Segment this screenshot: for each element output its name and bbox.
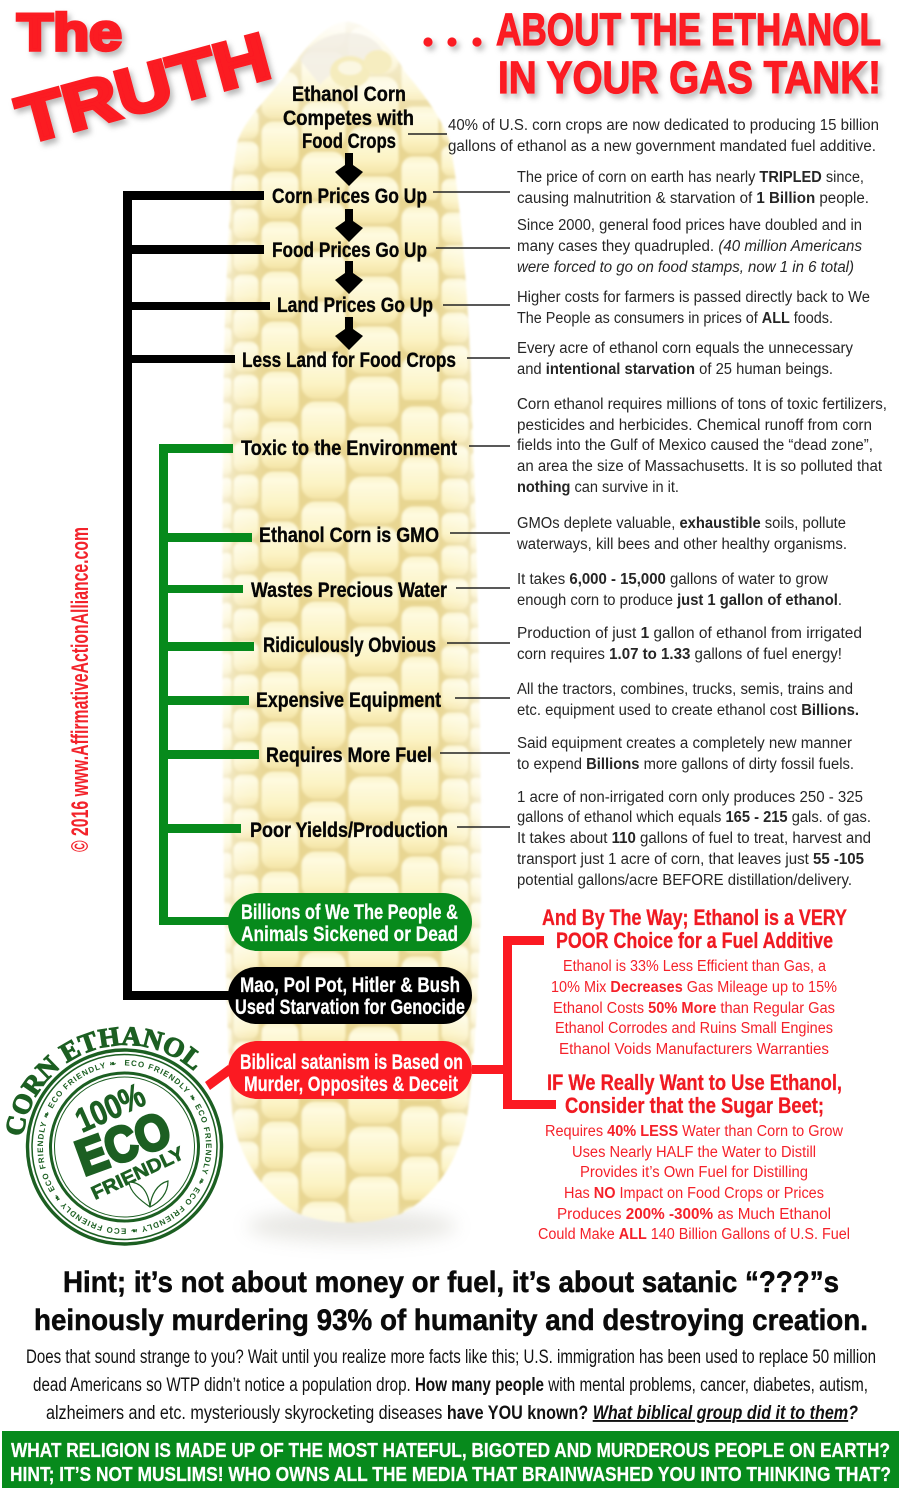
red bracket connecting biblical satanism to right column <box>472 936 556 1109</box>
red panel: poor choice for a fuel additive: 10% Mix Decreases Gas Mileage up to 15% <box>551 979 837 996</box>
description texts, right column: nothing can survive in it. <box>517 479 679 496</box>
leader lines from labels to descriptions <box>408 134 510 827</box>
center chain labels: Wastes Precious Water <box>251 579 447 602</box>
center chain labels: Poor Yields/Production <box>250 819 448 842</box>
red panel: sugar beet: Requires 40% LESS Water than Corn to Grow <box>545 1123 844 1140</box>
description texts, right column: etc. equipment used to create ethanol cost Billions. <box>517 702 859 719</box>
description texts, right column: The People as consumers in prices of ALL foods. <box>517 310 833 327</box>
shadow under the cob <box>247 1210 457 1242</box>
description texts, right column: GMOs deplete valuable, exhaustible soils, pollute <box>517 515 846 532</box>
red panel: sugar beet: Has NO Impact on Food Crops or Prices <box>564 1185 824 1202</box>
description texts, right column: gallons of ethanol which equals 165 - 215 gals. of gas. <box>517 809 871 826</box>
green footer banner <box>2 1431 899 1488</box>
description texts, right column: waterways, kill bees and other healthy organisms. <box>516 536 847 553</box>
center chain labels: Toxic to the Environment <box>241 437 457 460</box>
red panel: sugar beet: IF We Really Want to Use Ethanol, <box>547 1070 842 1095</box>
red panel: sugar beet: Produces 200% -300% as Much Ethanol <box>557 1206 831 1223</box>
ECO: ECO <box>69 1101 178 1186</box>
pill: billions sickened or dead: Animals Sickened or Dead <box>241 923 458 946</box>
curved corn ethanol heading: CORN ETHANOL <box>6 1026 200 1135</box>
flow arrows down the cob <box>335 153 363 350</box>
description texts, right column: were forced to go on food stamps, now 1 in 6 total) <box>517 259 854 276</box>
description texts, right column: 1 acre of non-irrigated corn only produces 250 - 325 <box>517 789 863 806</box>
center chain labels: Food Crops <box>302 130 396 153</box>
center chain labels: Ethanol Corn is GMO <box>259 524 439 547</box>
red panel: poor choice for a fuel additive: Ethanol Voids Manufacturers Warranties <box>559 1041 829 1058</box>
title: The Truth: The <box>17 4 122 62</box>
description texts, right column <box>448 117 887 889</box>
center chain labels: Ridiculously Obvious <box>263 634 436 657</box>
pill: biblical satanism: Murder, Opposites & Deceit <box>244 1073 458 1096</box>
red panel: poor choice for a fuel additive: Ethanol Corrodes and Ruins Small Engines <box>555 1020 833 1037</box>
pill: biblical satanism: Biblical satanism is Based on <box>240 1051 463 1074</box>
center chain labels: Requires More Fuel <box>266 744 432 767</box>
description texts, right column: many cases they quadrupled. (40 million Americans <box>517 238 862 255</box>
red panel: sugar beet: Uses Nearly HALF the Water to Distill <box>572 1144 816 1161</box>
hint headline <box>34 1266 868 1337</box>
pill: starvation for genocide: Mao, Pol Pot, Hitler & Bush <box>240 974 460 997</box>
description texts, right column: corn requires 1.07 to 1.33 gallons of fuel energy! <box>517 646 842 663</box>
green bracket connecting environmental effects <box>159 444 259 925</box>
description texts, right column: causing malnutrition & starvation of 1 Billion people. <box>517 190 869 207</box>
description texts, right column: an area the size of Massachusetts. It is so polluted that <box>517 458 883 475</box>
pill: billions sickened or dead <box>228 893 472 951</box>
description texts, right column: enough corn to produce just 1 gallon of ethanol. <box>517 592 842 609</box>
leaf icon <box>129 1181 168 1207</box>
description texts, right column: potential gallons/acre BEFORE distillation/delivery. <box>517 872 852 889</box>
description texts, right column: It takes about 110 gallons of fuel to treat, harvest and <box>517 830 871 847</box>
red panel: poor choice for a fuel additive <box>542 905 847 1058</box>
center chain labels <box>241 83 457 842</box>
description texts, right column: to expend Billions more gallons of dirty fossil fuels. <box>517 756 854 773</box>
red panel: poor choice for a fuel additive: Ethanol Costs 50% More than Regular Gas <box>553 1000 835 1017</box>
center chain labels: Ethanol Corn <box>292 83 406 106</box>
stamp rings <box>28 1050 222 1244</box>
pill: starvation for genocide: Used Starvation for Genocide <box>235 996 465 1019</box>
corn cob illustration <box>210 10 495 1242</box>
red panel: sugar beet: Consider that the Sugar Beet; <box>565 1093 824 1118</box>
description texts, right column: transport just 1 acre of corn, that leaves just 55 -105 <box>517 851 864 868</box>
closing paragraph <box>26 1347 876 1424</box>
description texts, right column: All the tractors, combines, trucks, semis, trains and <box>517 681 853 698</box>
heading: about the ethanol in your gas tank <box>424 4 881 103</box>
copyright vertical text: © 2016 www.AffirmativeActionAlliance.com <box>67 527 94 852</box>
description texts, right column: gallons of ethanol as a new government mandated fuel additive. <box>448 138 876 155</box>
stamp: corn ethanol 100% eco friendly <box>6 1026 224 1246</box>
description texts, right column: Said equipment creates a completely new manner <box>517 735 852 752</box>
description texts, right column: The price of corn on earth has nearly TRIPLED since, <box>517 169 864 186</box>
description texts, right column: fields into the Gulf of Mexico caused the “dead zone”, <box>517 437 873 454</box>
description texts, right column: Production of just 1 gallon of ethanol from irrigated <box>517 625 862 642</box>
description texts, right column: and intentional starvation of 25 human beings. <box>517 361 833 378</box>
pill: billions sickened or dead: Billions of We The People & <box>241 901 458 924</box>
red panel: sugar beet: Could Make ALL 140 Billion Gallons of U.S. Fuel <box>538 1226 850 1243</box>
hint headline: Hint; it’s not about money or fuel, it’s about satanic “???”s <box>63 1266 839 1299</box>
FRIENDLY: FRIENDLY <box>88 1143 188 1205</box>
description texts, right column: Since 2000, general food prices have doubled and in <box>517 217 862 234</box>
description texts, right column: pesticides and herbicides. Chemical runoff from corn <box>517 417 872 434</box>
center chain labels: Food Prices Go Up <box>272 239 427 262</box>
red panel: sugar beet: Provides it’s Own Fuel for Distilling <box>580 1164 808 1181</box>
center chain labels: Competes with <box>283 107 414 130</box>
black bracket connecting food effects <box>123 191 270 1000</box>
title: The Truth: TRUTH <box>9 18 278 158</box>
description texts, right column: It takes 6,000 - 15,000 gallons of water to grow <box>517 571 829 588</box>
center chain labels: Land Prices Go Up <box>277 294 433 317</box>
closing paragraph: alzheimers and etc. mysteriously skyrocketing diseases have YOU known? What biblical group did it to them? <box>46 1403 858 1424</box>
pill: biblical satanism <box>228 1041 472 1099</box>
corn kernels <box>222 22 482 1224</box>
red panel: poor choice for a fuel additive: Ethanol is 33% Less Efficient than Gas, a <box>563 958 826 975</box>
pill: starvation for genocide <box>228 967 472 1024</box>
ring text: ECO FRIENDLY ❧ ECO FRIENDLY ❧ ECO FRIENDLY ❧ ECO FRIENDLY ❧ ECO FRIENDLY ❧ ECO FRIENDLY ❧ <box>37 1060 212 1234</box>
red panel: poor choice for a fuel additive: POOR Choice for a Fuel Additive <box>556 928 833 953</box>
description texts, right column: Corn ethanol requires millions of tons of toxic fertilizers, <box>517 396 887 413</box>
red panel: sugar beet <box>538 1070 850 1243</box>
description texts, right column: Every acre of ethanol corn equals the unnecessary <box>517 340 853 357</box>
red connector from stamp to pill <box>205 1065 233 1090</box>
center chain labels: Less Land for Food Crops <box>242 349 456 372</box>
100%: 100% <box>70 1076 151 1140</box>
description texts, right column: Higher costs for farmers is passed directly back to We <box>517 289 870 306</box>
description texts, right column: 40% of U.S. corn crops are now dedicated to producing 15 billion <box>448 117 879 134</box>
center chain labels: Expensive Equipment <box>256 689 441 712</box>
center chain labels: Corn Prices Go Up <box>272 185 427 208</box>
